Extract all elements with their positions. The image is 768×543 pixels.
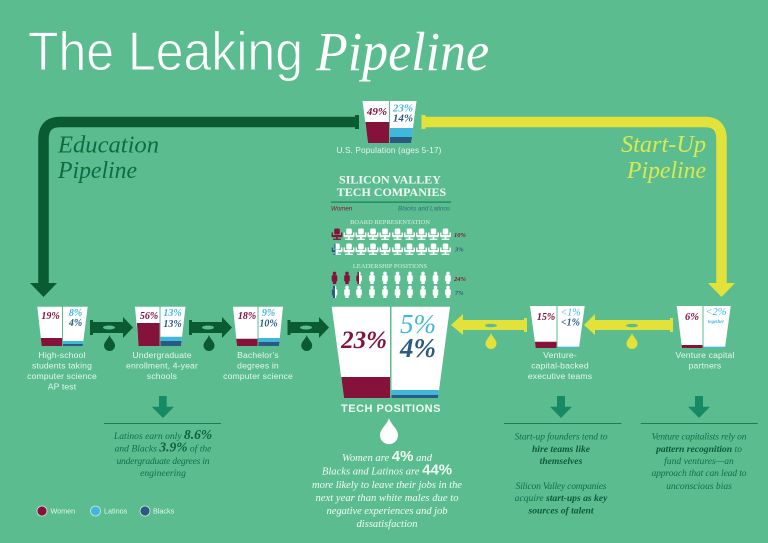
minority leadership row xyxy=(332,286,451,298)
callout: venture capitalists xyxy=(641,423,758,492)
text: attrition note: Blacks and Latinos are 44% xyxy=(322,462,452,478)
cup: bachelor's degrees: 10% xyxy=(259,318,278,330)
cup: undergraduate enrollment: 13% xyxy=(163,319,182,330)
heading: Silicon Valley tech companies: SILICON VALLEY xyxy=(339,172,441,186)
label: high-school students xyxy=(27,350,97,392)
cup: high-school AP test: 19% xyxy=(41,311,60,322)
callout: start-up founders: Silicon Valley companies xyxy=(516,481,607,492)
leadership positions pictogram: LEADERSHIP POSITIONS xyxy=(353,263,428,270)
label: venture capital partners xyxy=(675,350,735,370)
cup: bachelor's degrees xyxy=(233,307,283,346)
board representation pictogram: 10% xyxy=(454,232,466,239)
label: venture-capital-backed teams: executive teams xyxy=(528,371,592,381)
cup: high-school AP test: 4% xyxy=(68,318,82,329)
arrow: start-up leak 1 xyxy=(451,314,527,349)
arrow: Latinos and Blacks degrees xyxy=(152,396,174,418)
heading: Silicon Valley tech companies xyxy=(337,172,447,199)
key: women, blacks and Latinos xyxy=(331,206,450,212)
callout: venture capitalists: Venture capitalists rely on xyxy=(652,432,747,442)
label: venture capital partners: partners xyxy=(689,360,721,370)
label: venture-capital-backed teams: Venture- xyxy=(543,350,577,360)
cup: venture-capital-backed executive teams xyxy=(530,306,585,348)
women board row xyxy=(332,228,451,240)
text: attrition note: negative experiences and job xyxy=(326,506,448,517)
leadership positions pictogram: 24% xyxy=(453,276,466,283)
cup: venture-capital-backed executive teams: <1% xyxy=(560,308,581,318)
leadership positions pictogram xyxy=(332,263,466,298)
heading: start-up pipeline: Start-Up xyxy=(621,131,706,158)
heading: education pipeline: Pipeline xyxy=(57,157,137,184)
label: bachelor's degrees: Bachelor’s xyxy=(237,350,279,360)
callout: venture capitalists: pattern recognition to xyxy=(655,444,742,455)
callout: start-up founders: themselves xyxy=(540,456,583,467)
cup: undergraduate enrollment: 13% xyxy=(163,308,182,319)
title: Pipeline xyxy=(315,21,489,82)
callout: venture capitalists: approach that can lead to xyxy=(652,468,747,479)
cup: venture-capital-backed executive teams: 15% xyxy=(537,312,555,323)
board representation pictogram: BOARD REPRESENTATION xyxy=(350,219,430,226)
callout: engineering degrees: and Blacks 3.9% of the xyxy=(115,440,212,454)
label: undergraduate enrollment: Undergraduate xyxy=(132,350,192,360)
cup: undergraduate enrollment: 56% xyxy=(140,311,158,322)
heading: start-up pipeline: Pipeline xyxy=(626,157,706,184)
label: U.S. population: U.S. Population (ages 5-17) xyxy=(336,146,442,155)
cup: U.S. population: 14% xyxy=(393,112,413,124)
label: undergraduate enrollment xyxy=(126,350,198,381)
label: bachelor's degrees: computer science xyxy=(223,371,293,381)
cup: tech positions: 5% xyxy=(400,309,436,339)
callout: start-up founders: sources of talent xyxy=(527,506,594,516)
text: attrition note: more likely to leave their jobs in the xyxy=(312,480,462,491)
label: high-school students: AP test xyxy=(48,382,77,392)
cup: venture capital partners: together xyxy=(708,320,724,325)
legend xyxy=(37,506,175,516)
label: high-school students: High-school xyxy=(38,350,86,360)
label: bachelor's degrees: degrees in xyxy=(237,360,279,370)
label: bachelor's degrees xyxy=(223,350,293,381)
board representation pictogram: 3% xyxy=(454,246,464,254)
cup: high-school AP test: 8% xyxy=(69,308,82,319)
label: venture capital partners: Venture capital xyxy=(675,350,735,360)
arrow: education leak 1 xyxy=(90,317,133,351)
callout: venture capitalists: fund ventures—an xyxy=(664,456,734,467)
cup: bachelor's degrees: 18% xyxy=(238,311,256,322)
board representation pictogram xyxy=(332,219,466,255)
title: The Leaking xyxy=(28,20,303,82)
cup: undergraduate enrollment xyxy=(135,307,186,346)
text: attrition note: Women are 4% and xyxy=(342,448,433,465)
key: women, blacks and Latinos: Blacks and Latinos xyxy=(398,206,450,212)
text: attrition note: next year than white males due to xyxy=(316,493,458,504)
legend item: Blacks: Blacks xyxy=(153,506,175,516)
callout: start-up founders: hire teams like xyxy=(532,444,591,455)
arrow: start-up founders xyxy=(550,396,572,418)
key: women, blacks and Latinos: Women xyxy=(331,206,353,212)
arrow: education leak 2 xyxy=(189,317,232,351)
heading: education pipeline xyxy=(57,132,159,184)
label: venture-capital-backed teams xyxy=(528,350,592,381)
education pipeline line and arrow xyxy=(30,115,359,297)
icon: white drop xyxy=(380,418,398,444)
heading: Silicon Valley tech companies: TECH COMPANIES xyxy=(337,185,447,199)
cup: bachelor's degrees: 9% xyxy=(262,308,275,319)
callout: engineering degrees: engineering xyxy=(140,468,186,479)
title xyxy=(28,20,489,82)
minority board row xyxy=(332,244,451,255)
callout: start-up founders xyxy=(504,423,622,516)
cup: high-school AP test xyxy=(37,307,88,346)
label: venture-capital-backed teams: capital-backed xyxy=(531,360,589,370)
heading: start-up pipeline xyxy=(621,131,706,184)
label: high-school students: students taking xyxy=(32,360,92,370)
label: undergraduate enrollment: enrollment, 4-year xyxy=(126,360,198,370)
text: attrition note: dissatisfaction xyxy=(356,519,418,530)
callout: start-up founders: Start-up founders tend to xyxy=(514,432,608,442)
cup: U.S. population: 23% xyxy=(392,102,413,114)
legend item: women: Women xyxy=(50,506,75,516)
cup: venture capital partners xyxy=(677,306,731,348)
cup: U.S. population xyxy=(362,101,416,143)
label: tech positions: TECH POSITIONS xyxy=(341,403,441,415)
callout: engineering degrees xyxy=(104,423,221,479)
arrow: start-up leak 2 xyxy=(584,314,673,349)
callout: engineering degrees: undergraduate degrees in xyxy=(116,456,210,467)
callout: venture capitalists: unconscious bias xyxy=(666,481,732,492)
label: high-school students: computer science xyxy=(27,371,97,381)
cup: U.S. population: 49% xyxy=(366,106,387,118)
callout: start-up founders: acquire start-ups as key xyxy=(515,493,608,504)
cup: tech positions: 23% xyxy=(340,327,387,354)
heading: education pipeline: Education xyxy=(57,132,159,158)
women leadership row xyxy=(332,272,451,284)
leadership positions pictogram: 7% xyxy=(455,290,464,297)
cup: venture capital partners: 6% xyxy=(685,312,699,323)
arrow: venture capitalists xyxy=(688,396,710,418)
arrow: education leak 3 xyxy=(288,317,329,351)
label: undergraduate enrollment: schools xyxy=(147,371,177,381)
legend item: Latinos: Latinos xyxy=(104,506,128,516)
cup: tech positions xyxy=(332,307,450,398)
cup: venture-capital-backed executive teams: <1% xyxy=(561,318,580,328)
start-up pipeline line and arrow xyxy=(422,115,735,297)
cup: tech positions: 4% xyxy=(399,333,436,363)
callout: engineering degrees: Latinos earn only 8.6% xyxy=(113,427,212,442)
text: attrition note xyxy=(312,448,462,530)
cup: venture capital partners: <2% xyxy=(705,307,727,318)
